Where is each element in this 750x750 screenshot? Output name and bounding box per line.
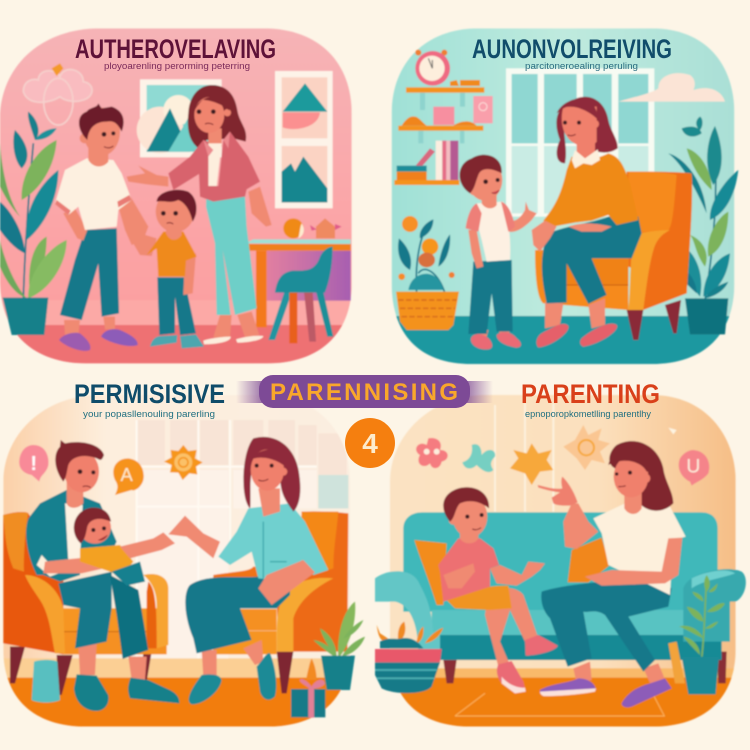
boy <box>55 103 148 351</box>
sofa <box>375 512 746 683</box>
mother <box>127 85 272 344</box>
boy <box>438 487 558 693</box>
man with toddler <box>26 440 179 711</box>
room: mint wall and teal floor <box>388 28 738 366</box>
wall ornament <box>23 63 92 125</box>
room: peach wall and orange floor <box>388 395 738 728</box>
title: uninvolved panel heading: AUNONVOLREIVING <box>472 34 672 64</box>
title: permissive panel heading: PERMISISIVE <box>74 379 225 409</box>
panel: authoritative parenting <box>0 28 353 365</box>
flower pot left <box>375 622 443 693</box>
cloud <box>618 73 725 102</box>
subtitle: authoritative panel: ployoarenling perorming peterring <box>104 61 250 71</box>
title: parenting panel heading: PARENTING <box>521 379 660 409</box>
plant, gift and cone <box>291 602 365 718</box>
panel: permissive parenting <box>0 395 365 728</box>
title: authoritative panel heading: AUTHEROVELAVING <box>75 34 276 64</box>
room: cream wall and orange floor <box>0 395 353 728</box>
subtitle: permissive panel: your popasllenouling parerling <box>83 409 215 419</box>
table with apple and toy <box>243 218 351 327</box>
armchair <box>535 172 692 340</box>
central banner <box>236 375 493 408</box>
central banner: PARENNISING <box>270 379 458 406</box>
mother <box>538 441 686 707</box>
number badge: 4 <box>362 428 378 459</box>
room: pink wall and floor <box>0 28 353 365</box>
wall decorations <box>416 425 709 486</box>
plant and pot right <box>668 575 725 694</box>
panel: uninvolved parenting <box>388 28 738 366</box>
picture: abstract tiles <box>275 71 333 208</box>
mug <box>32 660 60 702</box>
speech icons: ! <box>30 453 37 475</box>
plant <box>0 112 67 335</box>
pillow behind boy <box>414 540 447 605</box>
subtitle: parenting panel: epnoporopkometlling parentlhy <box>525 409 651 419</box>
potted flowers in basket <box>396 216 459 330</box>
pillow behind mother <box>568 538 610 582</box>
subtitle: uninvolved panel: parcitoneroealing peruling <box>525 61 638 71</box>
chair <box>268 247 333 343</box>
shelves with clock, frames and books <box>394 50 493 185</box>
plant right <box>667 117 738 334</box>
panel: neglectful parenting <box>375 395 746 728</box>
speech icons <box>19 445 203 495</box>
speech icons: A <box>121 464 134 485</box>
window <box>133 420 348 658</box>
wall decorations: U <box>686 456 700 477</box>
mother <box>532 97 642 347</box>
boy <box>460 155 537 349</box>
left armchair <box>3 512 168 695</box>
woman <box>168 437 328 704</box>
window <box>506 68 654 217</box>
right armchair <box>213 511 348 693</box>
number badge <box>345 418 395 468</box>
child <box>128 190 204 348</box>
picture: mountains <box>137 79 222 157</box>
